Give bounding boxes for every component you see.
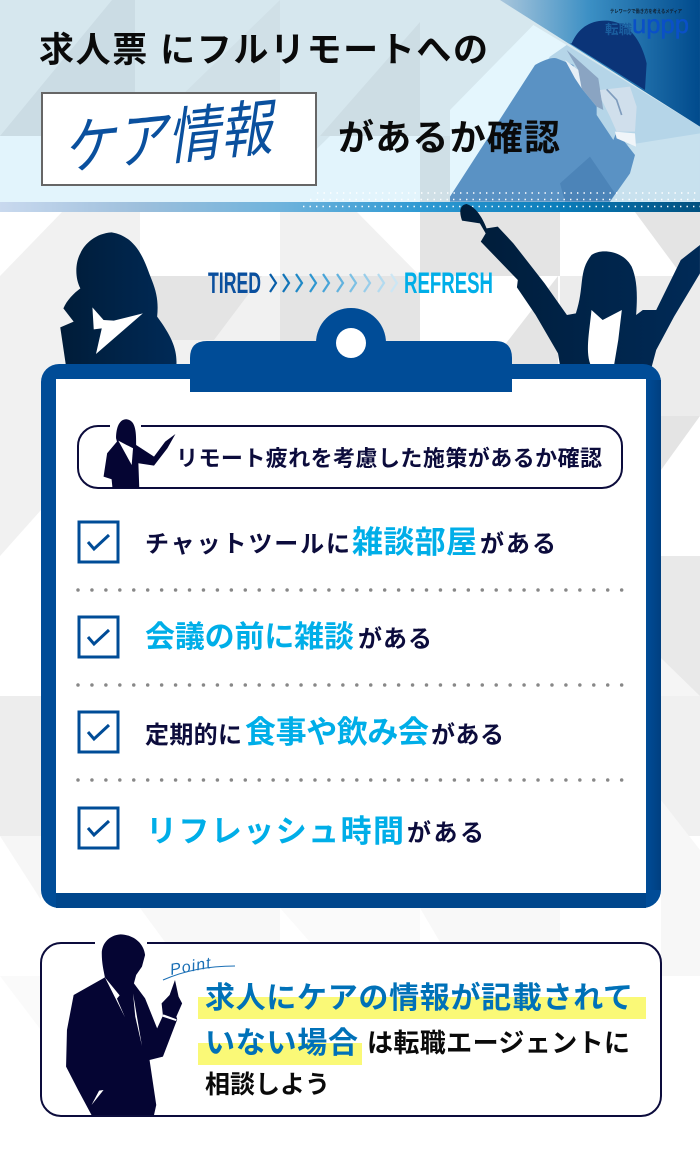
divider dots <box>78 778 624 782</box>
tired to refresh label <box>208 267 493 300</box>
logo: 転職 <box>605 22 632 37</box>
silhouette: refreshed woman <box>460 204 700 367</box>
highlight bars <box>198 997 646 1019</box>
point text: 求人にケアの情報が記載されて <box>205 981 633 1015</box>
point label <box>163 955 235 980</box>
divider dots <box>78 683 624 687</box>
checklist row 3: 食事や飲み会 <box>245 715 429 750</box>
shirt collar <box>565 60 582 88</box>
checklist row 2: がある <box>358 625 432 653</box>
checklist row 1: チャットツールに <box>145 531 350 558</box>
icon: presenter woman <box>104 419 175 488</box>
hand <box>600 87 637 132</box>
divider dots <box>78 588 624 592</box>
header <box>0 0 700 212</box>
checklist row 4: リフレッシュ時間 <box>146 814 404 849</box>
chevrons <box>270 274 397 292</box>
heading highlight box: ケア情報 <box>62 92 281 183</box>
silhouette: tired woman <box>60 232 177 367</box>
icon: man pointing up <box>66 934 182 1115</box>
point panel: 相談しよう <box>205 1071 330 1099</box>
hair <box>570 21 647 90</box>
checklist row 2 <box>79 617 432 657</box>
point panel <box>41 934 661 1116</box>
photo: seated man <box>450 0 700 202</box>
section heading pill <box>78 419 622 488</box>
tired to refresh label: TIRED <box>208 267 261 300</box>
colour band <box>0 202 700 212</box>
heading line 1: 求人票 にフルリモートへの <box>39 31 488 70</box>
checklist row 1 <box>79 522 556 562</box>
logo: uppp <box>632 9 689 39</box>
suit <box>450 58 635 202</box>
checklist row 3 <box>79 712 504 752</box>
neck and face <box>567 50 603 110</box>
section heading pill: リモート疲れを考慮した施策があるか確認 <box>176 446 602 471</box>
clipboard clip <box>190 308 512 392</box>
logo: テレワークで働き方を考えるメディア <box>610 8 682 15</box>
top right triangle <box>500 0 700 127</box>
checklist row 3: がある <box>431 721 504 749</box>
point label: Point <box>169 955 213 979</box>
heading line 2: があるか確認 <box>338 117 560 158</box>
logo <box>605 8 689 39</box>
point panel: いない場合 <box>205 1027 358 1060</box>
checklist row 4: がある <box>407 819 484 847</box>
tired to refresh label: REFRESH <box>404 267 493 300</box>
clipboard panel <box>41 308 661 908</box>
shirt cuff <box>615 132 636 147</box>
light band <box>450 25 567 197</box>
checklist row 4 <box>79 808 484 849</box>
checklist row 1: 雑談部屋 <box>352 525 477 560</box>
checklist row 2: 会議の前に雑談 <box>145 621 354 654</box>
checklist row 1: がある <box>480 530 556 558</box>
sky <box>450 45 700 202</box>
checklist row 3: 定期的に <box>145 722 242 749</box>
point panel: は転職エージェントに <box>367 1028 630 1058</box>
